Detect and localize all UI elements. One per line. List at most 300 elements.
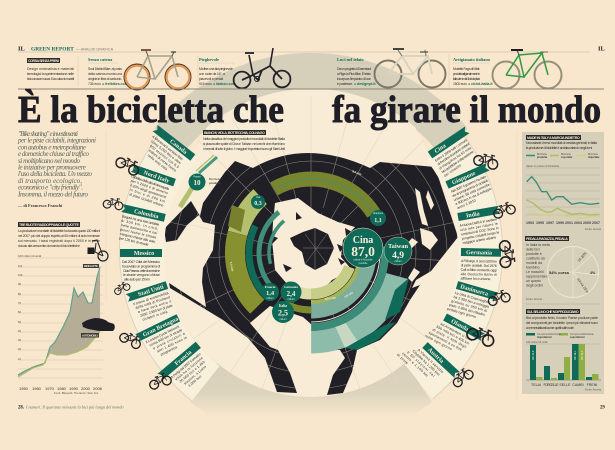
author: — di Francesco Franchi [17,203,63,208]
wedge: Messico: le strade vengono chiuse [123,273,160,277]
panel: bar chart components: Mln 34,9 [532,350,535,360]
bubble: Cina 87,0: Cina [353,235,373,246]
line chart: bikes vs cars: 1950 [19,386,29,391]
header block: luci nel telaio: Luci nel telaio [337,57,364,62]
header block: luci nel telaio: ● designyd.it [354,82,376,86]
header block: artigianato italiano [449,54,493,88]
wedge: Stati Uniti: 2030: 2.900 km di piste [140,304,173,318]
wedge: Stati Uniti: ciclabili in città [142,310,168,322]
wedge: Cina [428,127,483,178]
wedge: Gran Bretagna: Gran Bretagna [142,316,180,339]
wedge: Stati Uniti: Stati Uniti [138,284,165,298]
bike: white frame [374,49,446,88]
panel: pedala ragazza pie: 54% corsa [549,270,570,275]
wedge: Colombia: per 120 km di strade [119,236,149,247]
bubble: Taiwan 4,9 [384,237,412,265]
bubble: Italia: 2,5 [278,308,288,318]
header block: pieghevole [198,56,236,87]
wedge: Olanda: spostamenti è su due [428,331,463,352]
panel: pedala ragazza pie: PEDALA RAGAZZA, PEDALA [526,237,568,241]
panel: bar chart components: importazioni [537,336,552,339]
header rule [18,88,604,90]
panel: made in Italy line chart: Biciclette [537,153,548,156]
header block: artigianato italiano: Artigianato italiano [453,57,491,62]
header block: pieghevole: 915 euro [199,82,212,86]
line chart: bikes vs cars: sul mercato. I tassi registrati dopo il 2000 è in parte [18,239,100,243]
panel: made in Italy line chart: importate [588,156,600,159]
bubble: Italia: Italia [279,304,287,308]
header block: senza catena: 735 euro [88,82,101,86]
wedge: Giappone: urbane: 80 città coinvolte [453,183,490,202]
arc value labels: 9,6 mln [352,169,362,176]
line chart: bikes vs cars: 20 [18,347,21,351]
wedge: Messico: ha avviato un programma di [122,264,160,268]
wedge: Danimarca [447,280,498,323]
panel: bar chart components: FORCELLE [544,383,559,387]
wedge: Francia: Francia [174,350,193,367]
panel: made in Italy line chart: Nonostante i trend mondiali di crescita generali, in Italia [526,141,597,145]
panel: made in Italy line chart: 2003 [574,221,582,225]
line chart: bikes vs cars: TRE RUOTE RADDOPPIANO LE QUOTTE [19,223,79,227]
header block: corsa senza freni: CORSA SENZA FRENI [28,59,59,63]
text panels ring: left [142,145,206,383]
intro quote: le iniziative per promuovere [18,164,86,172]
panel: made in Italy line chart: 1997 [546,221,554,225]
wedge: Olanda: di piste. Il 40% degli [432,328,467,349]
islands and land on the right of the map [407,188,445,288]
wedge: Nord Italy [123,164,176,209]
bike: green frame [492,50,562,88]
wedge: Austria: Citybike ha 1.200 bici [412,349,441,377]
wedge: Danimarca: Danimarca [459,284,489,298]
bubble: Cina 87,0: milioni di biciclette [353,258,373,262]
wedge: Canada: A Montreal il servizio Bixi [151,135,184,161]
intro quote: e domeniche chiuse al traffico [18,150,90,158]
panel: bar chart components [526,309,602,392]
wedge: Giappone: Giappone [451,171,477,186]
header block: pieghevole: Pieghevole [199,57,219,62]
wedge: Cina: di Hangzhou ha 50 mila [438,146,472,171]
arc value labels: 236 mila [319,279,331,287]
top masthead: IL [18,46,26,52]
wedge: Danimarca: gratuito su 350 km di [451,299,488,313]
intro quote [17,130,96,198]
divider [526,303,600,305]
intro quote: "Bike sharing" e investimenti [18,130,78,138]
top masthead: IL [598,46,606,52]
line chart: bikes vs cars: 2000 [81,386,91,391]
line chart: bikes vs cars: 1970 [45,386,55,391]
header block: luci nel telaio [337,57,376,86]
bottom-right coloured arcs: Europe and Asia [202,144,420,362]
map caption: BIANCHI, VIOLA, BOTTECCHIA, COLNAGO [204,131,265,135]
wedge: Nord Italy: Nord Italy [143,170,170,185]
wedge: Cina: Cina [434,143,447,155]
gutter lines [106,130,517,400]
wedge: Olanda: 550 mila bici e 400 km [436,325,470,346]
panel: bar chart components: FRENI [587,383,597,387]
top masthead: — ANALISI GRAFICA [76,48,114,52]
wedge: Colombia: vengono chiuse alle auto [120,232,156,244]
bubble: Germania: 2,4 [287,290,296,298]
bubble: Taiwan 4,9: Taiwan [388,243,408,250]
icon: car [82,318,115,331]
footer left: I numeri. Il quarante minuara la bici più lunga del mondo [25,404,124,410]
bubble: USA 0,3 [251,195,265,209]
main title right: fa girare il mondo [332,89,601,131]
text panels ring: right [418,146,480,381]
wedge: Colombia: nelle domeniche e nei [121,223,158,235]
bubble: Cina 87,0: 87,0 [351,244,375,259]
panel: pedala ragazza pie: prodotte è [526,252,542,256]
map caption: Nella classifica dei maggiori produttori mondiali di biciclette l'Italia [203,137,285,141]
wedge: Austria [396,333,460,395]
wedge: Austria: A Vienna il servizio [417,348,444,374]
header block: senza catena [78,56,128,87]
panel: pedala ragazza pie: Fonte: Ancma [526,297,543,301]
intro quote: si moltiplicano nel mondo [18,157,80,165]
wedge: Francia: A Parigi dal 2007 il servizio [170,352,202,380]
wedge: Gran Bretagna [135,314,190,363]
wedge: Germania: Germania [466,250,492,257]
panel: made in Italy line chart: 2005 [583,221,591,225]
grey top band of the globe [169,72,453,140]
wedge: India: India [466,211,480,220]
arc value labels: 4,9 mln [344,290,354,299]
panel: bar chart components: 100 milioni di unità [526,340,548,344]
line chart: bikes vs cars: 30 [18,338,21,342]
header block: pieghevole: ● idahon.com [213,82,236,86]
arc value labels [229,169,362,301]
wedge: India [457,206,504,245]
arc value labels: 1,4 mln [229,261,235,272]
wedge: Olanda [424,309,485,362]
header block: artigianato italiano: ● ciclot-italia.it [468,82,493,86]
panel: pedala ragazza pie: delle bici [526,248,540,252]
intro quote: per le piste ciclabili, integrazioni [17,137,96,145]
wedge: India: maggiori arterie urbane [462,235,496,245]
small bikes around the ring [103,151,516,390]
wedge: Cina: di Pechino dovranno dotarsi [437,142,471,166]
world map ocean silhouette with graticule [165,153,458,395]
wedge: Francia: 4.000 bici [187,374,202,388]
intro quote: economico e "city friendly". [18,184,83,192]
panel: pedala ragazza pie: 4% [590,271,596,275]
wedge: Colombia: Colombia [133,209,159,220]
wedge: Messico: Ciclo Paseos: nelle domeniche [123,269,160,273]
bubble: Germania [280,282,302,302]
panel: made in Italy line chart: Biciclette [561,153,572,156]
intro quote: Insomma, il mezzo del futuro [17,190,88,198]
panel: pedala ragazza pie: Le maschili [526,270,544,274]
wedge: Francia [157,342,216,398]
legend bubble: 10: 10 [194,179,201,187]
panel: bar chart components: Mln 38,0 [581,350,584,360]
right panel background [522,132,604,394]
panel: pedala ragazza pie: rappresentano [526,274,549,278]
wedge: Giappone: via al programma di ciclabili [451,179,489,198]
bubble: USA 0,3: 0,3 [254,201,262,207]
wedge: Francia: 20.000 bici e 1.450 [179,360,206,384]
panel: pedala ragazza pie: In Italia la metà [526,243,550,247]
top olive arc: Giappone [210,152,412,354]
intro quote: con autobus e metropolitane [18,143,86,151]
bubble: Giappone 1,1 [370,210,386,226]
wedge: Stati Uniti: a New York entro il [137,299,172,314]
wedge: Austria: centro e 1.100 km [401,352,429,378]
header block: senza catena: della catena monta una [88,72,122,76]
panel: made in Italy line chart: Biciclette [588,153,599,156]
bubble: Italia: milioni [280,318,287,321]
panel: bar chart components: Componenti/biciclette [537,333,562,336]
panel: made in Italy line chart: la produzione di biciclette è andata calando negli anni [526,146,592,150]
line chart: bikes vs cars: 60 [18,310,21,314]
legend bubble: 10: Paese [193,174,201,178]
bubble: Germania: Germania [284,285,298,289]
line chart: bikes vs cars: 100 milioni di unità [18,254,42,258]
wedge: Nord Italy: di piste ciclabili urbane [129,192,164,208]
line chart: bikes vs cars: 90 [18,282,21,286]
footer left: 28. [18,406,24,410]
line chart: bikes vs cars: La produzione mondiale di biciclette ha toccato quota 130 milioni [18,229,100,233]
wedge: Colombia [115,204,166,249]
panel: made in Italy line chart: 2007 [592,221,600,225]
panel: made in Italy line chart: prodotte [537,156,548,159]
line chart: bikes vs cars: Fonti: Bikeweb, The Econ. Stat. Ind. [54,391,99,395]
wedge: Messico [120,249,162,282]
header block: senza catena: Soul District Bike: al posto [88,67,122,71]
header block: corsa senza freni: tecnologici: la sperimentazione nelle [27,72,74,76]
intro quote: l'uso della bicicletta. Un mezzo [18,170,92,178]
panel: bar chart components: TELAI [531,383,541,387]
wedge: Gran Bretagna: altri 1.400 sono in [156,336,188,354]
wedge: Giappone: Nel 2007 il governo ha dato [450,175,487,194]
wedge: Nord Italy: il 20% degli spostamenti [130,183,167,200]
panel: pedala ragazza pie: modelli da [526,261,542,265]
header block: pieghevole: con ruote da 16", a [199,72,225,76]
legend bubble: 10: prodotte [209,181,221,185]
main title left: È la bicicletta che [18,89,284,131]
wedge: Cina: bici pubbliche a disposizione [441,150,475,174]
panel: bar chart components: Mln 38,1 [574,350,577,360]
wedge: India: progetto ciclabili lungo le [462,230,500,241]
header block: artigianato italiano: 1500 euro [453,82,467,86]
header block: artigianato italiano: prodotta artigianalmente in [453,72,480,76]
wedge: Gran Bretagna: programma [160,345,178,357]
top masthead: GREEN REPORT [31,46,74,52]
wedge: Giappone: entro il 2010 [457,198,477,210]
wedge: Olanda: Ad Amsterdam ci sono [439,322,473,342]
wedge: Gran Bretagna: conta 900 km di strade [149,328,183,347]
grey bottom band with fade [190,362,432,418]
bike: black folding [234,48,290,88]
bubble: Germania: milioni [288,298,295,301]
wedge: Stati Uniti: della città di Portland [135,295,170,310]
bubble: Francia [261,283,279,301]
wedge: Austria: e 60 stazioni nel [406,350,436,378]
top masthead [18,46,606,52]
line chart: bikes vs cars: 50 [18,320,21,324]
header block: pieghevole: piacevoli e pedali [199,77,223,81]
bubble: Francia: Francia [265,285,276,289]
wedge: Germania [461,248,501,281]
panel: bar chart components: SUL SELLINO CHE NOI PRODUCIAMO [527,310,579,314]
header block: corsa senza freni: bici conosce nuova. Ecco alcuni modelli [27,77,74,81]
cream globe disc [164,103,458,397]
faint meridian spokes [170,96,452,395]
wedge: Olanda: Olanda [450,319,469,333]
wedge: India: emissioni di CO2. Sono in [461,226,499,236]
panel: made in Italy line chart: 1993 [526,221,534,225]
line chart: bikes vs cars: 10 [18,357,21,361]
panel: pedala ragazza pie: donna 26% [576,277,589,294]
panel: made in Italy line chart: Fonte: Ancma [585,227,602,231]
panel: made in Italy line chart: Valori in milioni di biciclette [526,164,560,168]
line chart: bikes vs cars: nel 2007: più del doppio rispetto ai 50 milioni di auto immesse [18,234,100,238]
wedge: India: A Nuova Delhi è in cantiere [459,217,497,228]
bubble: Taiwan 4,9: milioni [395,260,402,263]
central cream land mass [272,198,355,298]
wedge: Stati Uniti [126,281,175,324]
panel: made in Italy line chart: 1999 [556,221,564,225]
wedge: Danimarca: piste: il 36% dei cittadini [449,303,486,317]
wedge: Cina: Entro il 2009 tutti i comuni [434,138,468,163]
bike: orange wheels [124,50,191,90]
header block: senza catena: cinghia in fibra di carbonio. [88,77,122,81]
wedge: Gran Bretagna: Il London Cycle Network [145,324,180,344]
header block: artigianato italiano: Italia, viene dai 1bici da pista [453,77,480,81]
header block: artigianato italiano: Modello Faga di Mixit: [453,67,480,71]
line chart: bikes vs cars [18,222,103,395]
panel: pedala ragazza pie: bambino. [526,266,540,270]
wedge: Canada: Canada [168,139,188,156]
header block: luci nel telaio: a Riga: la Plus Bike. È telaio [337,71,371,76]
wedge: Germania: affittare bici urbane [461,277,491,281]
line chart: bikes vs cars: 100 [18,273,23,277]
panel: bar chart components: Fonte: Ancma [585,388,602,392]
wedge: Colombia: Bogotà ha una rete ciclabile [122,214,160,227]
bubble: USA 0,3: Usa [256,196,261,199]
wedge: Nord Italy: in bici e di 200 km [129,188,166,204]
panel: pedala ragazza pie: un quarto [526,279,541,283]
panel: made in Italy line chart [526,135,602,231]
panel: pedala ragazza pie: costituito da [526,256,545,260]
header block: corsa senza freni: Design minimalista e materiali [27,67,74,71]
arc value labels: 640 mila [325,295,337,301]
line chart: bikes vs cars: 40 [18,329,21,333]
wedge: Germania: Call a Bike consente oggi [461,268,497,272]
panel: made in Italy line chart: esportate [561,156,573,159]
line chart: bikes vs cars: 1980 [57,386,67,391]
panel: made in Italy line chart: 1995 [536,221,544,225]
panel: bar chart components: Componenti/biciclette [570,333,595,336]
wedge: India: una rete per ridurre le [460,222,498,232]
footer page number: 29 [600,406,605,410]
panel: bar chart components: CAMBI [572,383,584,387]
wedge: Stati Uniti: Il piano di sostenibilità [133,291,169,306]
panel: bar chart components: dei componenti per biciclette: i pezzi più rilevanti sono [526,321,598,325]
bubble: Francia: milioni [267,297,274,300]
wedge: Germania: di piste ciclabili. Dal 1976 [461,263,497,268]
wedge: Messico: alle auto per 15 km [124,278,150,282]
bubble: Giappone 1,1: Giappone [373,212,384,215]
wedge: Austria: di piste [396,353,409,365]
bubble: Cina 87,0: prodotte [359,262,368,265]
header block: senza catena: ● fretbikes.com [102,82,128,86]
wedge: Germania: alle Deutsche Bahn di [461,272,497,277]
line chart: bikes vs cars: 80 [18,292,21,296]
wedge: Danimarca: La città di Copenaghen [454,291,491,305]
panel: bar chart components: esportazioni [570,336,585,339]
teal arcs on the left [223,165,399,341]
legend bubble: 10: Biciclette [209,177,221,181]
wedge: Messico: Dal 2007 Città del Messico [122,260,160,264]
wedge: Gran Bretagna: e piste ciclabili e [152,332,186,351]
wedge: Canada: nella sola città [147,153,168,171]
bubble: Italia [272,301,294,323]
intro quote: di trasporto ecologico, [18,177,82,185]
map caption [203,130,285,151]
wedge: Giappone [445,163,499,210]
wedge: Nord Italy: per il 2020 è di almeno [130,179,168,195]
map caption: si piazza alle spalle di Cina e Taiwan: nei cerchi che rifornirono [203,142,285,146]
line chart: bikes vs cars: 1960 [32,386,42,391]
map caption: i mercati di tutto il globo. I maggiori importatori sono gli Stati Uniti [203,147,285,151]
header block: luci nel telaio: incorpora l'impianto di luce [337,77,371,81]
header block: corsa senza freni [27,58,74,81]
panel: pedala ragazza pie [525,236,598,301]
bubble: Taiwan 4,9: 4,9 [392,251,404,261]
wedge: Francia: Vélib ha in funzione [174,356,204,382]
panel: pedala ragazza pie: 15-20% [577,251,588,263]
wedge: Canada [138,125,195,179]
bubble: Giappone 1,1: 1,1 [374,218,382,224]
icon: city bike [88,240,108,261]
panel: bar chart components: commercializzati come quelli sulle ruote [526,326,574,330]
line chart: bikes vs cars: 110 [18,264,23,268]
line chart: bikes vs cars: dovuto alla crescente domanda di bici elettriche [18,244,80,248]
left olive arc: USA [204,146,418,360]
wedge: Messico: Messico [134,251,154,257]
panel: made in Italy line chart: 2001 [565,221,573,225]
wedge: Canada: milioni di corse l'anno [148,149,177,173]
header block: luci nel telaio: e posteriore. [337,82,353,86]
bubble: Cina 87,0 [343,228,383,268]
panel: bar chart components: SELLE [559,383,571,387]
header block: pieghevole: Ma fine: una bici pieghevole [199,67,233,71]
panel: pedala ragazza pie: degli ordini [526,284,543,288]
arctic ocean [270,205,352,272]
bubble: Francia: 1,4 [266,290,275,297]
wedge: Danimarca: pedala ogni giorno [447,307,476,319]
ring outline [120,130,503,401]
wedge: Francia: stazioni, a Lione [183,365,207,386]
panel: bar chart components: Bici al prodotto finito, il nostro Paese produce parte [526,316,598,320]
line chart: bikes vs cars: 70 [18,301,21,305]
wedge: Olanda: ruote ogni giorno [424,334,453,351]
wedge: Germania: A Friburgo ci sono 500 km [461,259,497,264]
line chart: bikes vs cars: 2008 [93,386,103,391]
wedge: Nord Italy: L'obiettivo della città di Minneapolis [131,174,170,191]
line chart: bikes vs cars: AUTOMOBILI [82,334,98,338]
wedge: Giappone: e 900 km in via di sviluppo [455,187,492,206]
line chart: bikes vs cars: BICICLETTE [84,264,98,268]
legend bubble: 10 [180,155,221,207]
wedge: Colombia: di 300 km. In città, [121,219,159,231]
wedge: Colombia: giorni festivi le strade [120,227,157,240]
line chart: bikes vs cars: 1990 [69,386,79,391]
panel: made in Italy line chart: MADE IN ITALY A MARCIA INDIETRO [527,136,580,140]
